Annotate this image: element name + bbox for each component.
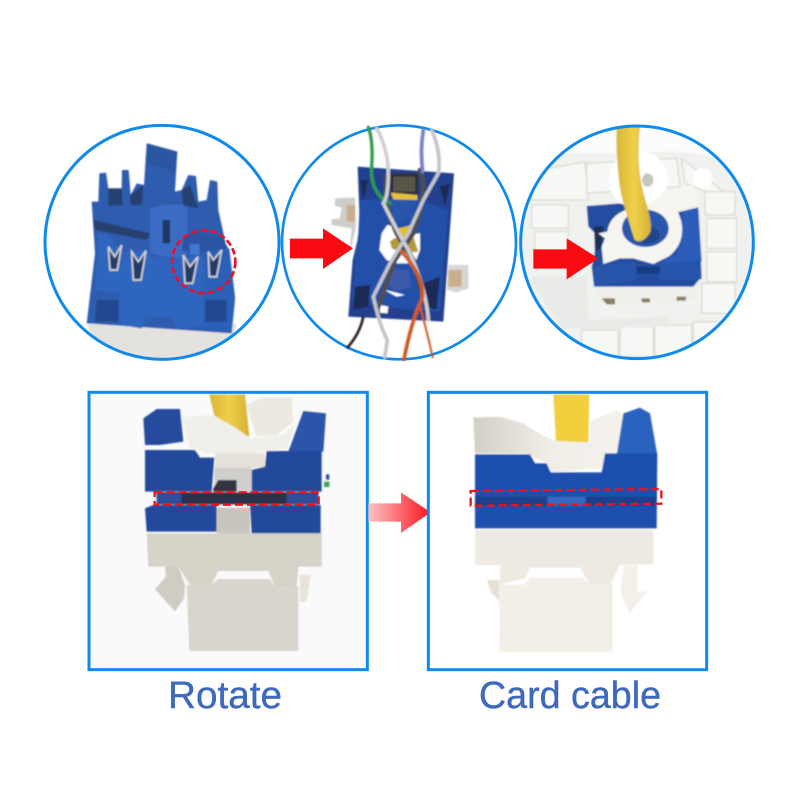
arrow: red right — [290, 228, 353, 269]
blue clip top — [143, 409, 183, 445]
wire bits — [324, 482, 329, 487]
faceplate — [522, 152, 752, 342]
centre gap — [214, 468, 252, 492]
rear blue body — [87, 143, 235, 333]
arrow: gradient red right — [368, 492, 431, 533]
white cap — [247, 398, 293, 437]
panel frame — [89, 392, 367, 670]
dark base band — [95, 300, 227, 322]
contact blades — [108, 245, 222, 283]
side clips — [332, 197, 356, 260]
white cap — [473, 410, 627, 472]
dark slots — [93, 185, 198, 240]
blue jack — [587, 203, 702, 287]
beige module — [475, 530, 653, 584]
cable opening — [622, 210, 669, 247]
panel: rotate photo — [89, 392, 367, 670]
seam band — [475, 497, 657, 506]
white rotating cap — [598, 185, 697, 264]
circle outline — [45, 125, 279, 359]
blue body — [475, 453, 657, 528]
blue top corner — [617, 408, 657, 455]
lower blue body — [145, 505, 321, 533]
panel: faceplate with cable circle — [520, 120, 760, 363]
panel: wired module circle — [282, 125, 516, 359]
centre window — [379, 225, 420, 263]
center post — [150, 205, 188, 260]
panel: keystone contacts circle — [45, 125, 279, 360]
wires — [348, 127, 439, 359]
highlight: dashed red rectangle — [155, 492, 319, 505]
grey base — [87, 324, 237, 360]
yellow cable — [553, 394, 589, 442]
label: Card cable: Card cable — [479, 675, 661, 717]
white base — [594, 287, 697, 303]
label: Rotate: Rotate — [168, 675, 282, 717]
highlight: dashed red circle — [172, 230, 235, 293]
yellow cable — [616, 127, 651, 241]
dark gap band — [157, 492, 318, 504]
arrow: red right — [533, 238, 598, 279]
circle outline — [521, 126, 753, 359]
beige module — [147, 533, 322, 587]
upper blue body — [145, 450, 214, 492]
circle outline — [282, 125, 516, 359]
panel frame — [428, 392, 707, 670]
yellow cable — [209, 394, 249, 437]
screw post — [610, 152, 667, 205]
panel: card cable photo — [428, 392, 707, 670]
front plate — [95, 233, 205, 328]
wire: dark core — [378, 170, 423, 307]
highlight: dashed red rectangle — [471, 489, 661, 506]
wire: green — [368, 127, 390, 203]
blue module body — [348, 167, 454, 322]
